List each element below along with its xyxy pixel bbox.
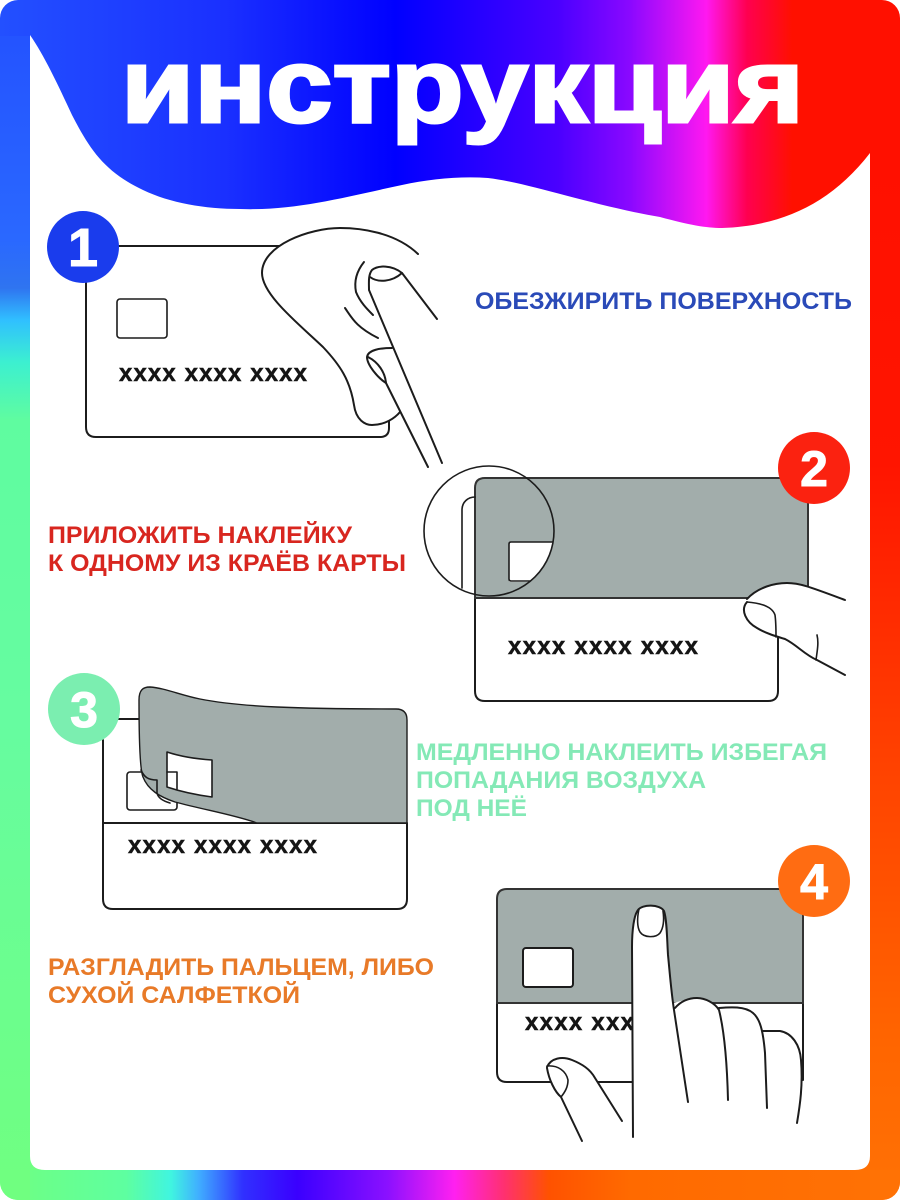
badge 1: 1 [68,218,98,278]
card 3: xxxx xxxx xxxx [128,832,318,859]
title: инструкция [121,27,804,145]
caption 3 [416,739,827,822]
icon: fingers holding sticker [744,583,845,675]
card 1 [86,246,389,437]
sticker peeling [139,687,407,823]
caption 3: МЕДЛЕННО НАКЛЕИТЬ ИЗБЕГАЯ [416,739,827,766]
card 3 [103,719,407,909]
caption 3: ПОПАДАНИЯ ВОЗДУХА [416,767,706,794]
step 4: smooth with finger or dry cloth [48,845,850,1141]
caption 4: РАЗГЛАДИТЬ ПАЛЬЦЕМ, ЛИБО [48,954,434,981]
badge 3: 3 [70,682,98,738]
badge 3 [48,673,120,745]
card 2 [424,466,808,701]
card 4 [497,889,803,1082]
icon: hand with cloth [262,228,442,467]
step 3: slowly apply, avoiding air [48,673,827,909]
caption 1: ОБЕЗЖИРИТЬ ПОВЕРХНОСТЬ [475,288,852,315]
caption 2: ПРИЛОЖИТЬ НАКЛЕЙКУ [48,521,353,549]
badge 2: 2 [800,441,828,497]
caption 4: СУХОЙ САЛФЕТКОЙ [48,981,300,1009]
step 1: degrease the surface [47,211,852,467]
card 2: xxxx xxxx xxxx [508,633,699,660]
caption 2 [48,521,406,577]
badge 1 [47,211,119,283]
badge 2 [778,432,850,504]
icon: hand smoothing sticker [547,906,802,1141]
step 2: attach sticker to an edge [48,432,850,701]
caption 3: ПОД НЕЁ [416,795,527,822]
card 1: xxxx xxxx xxxx [119,360,308,387]
caption 4 [48,954,434,1009]
badge 4: 4 [800,854,828,910]
caption 2: К ОДНОМУ ИЗ КРАЁВ КАРТЫ [48,550,406,577]
card 4: xxxx xxxx xxxx [525,1009,716,1036]
badge 4 [778,845,850,917]
